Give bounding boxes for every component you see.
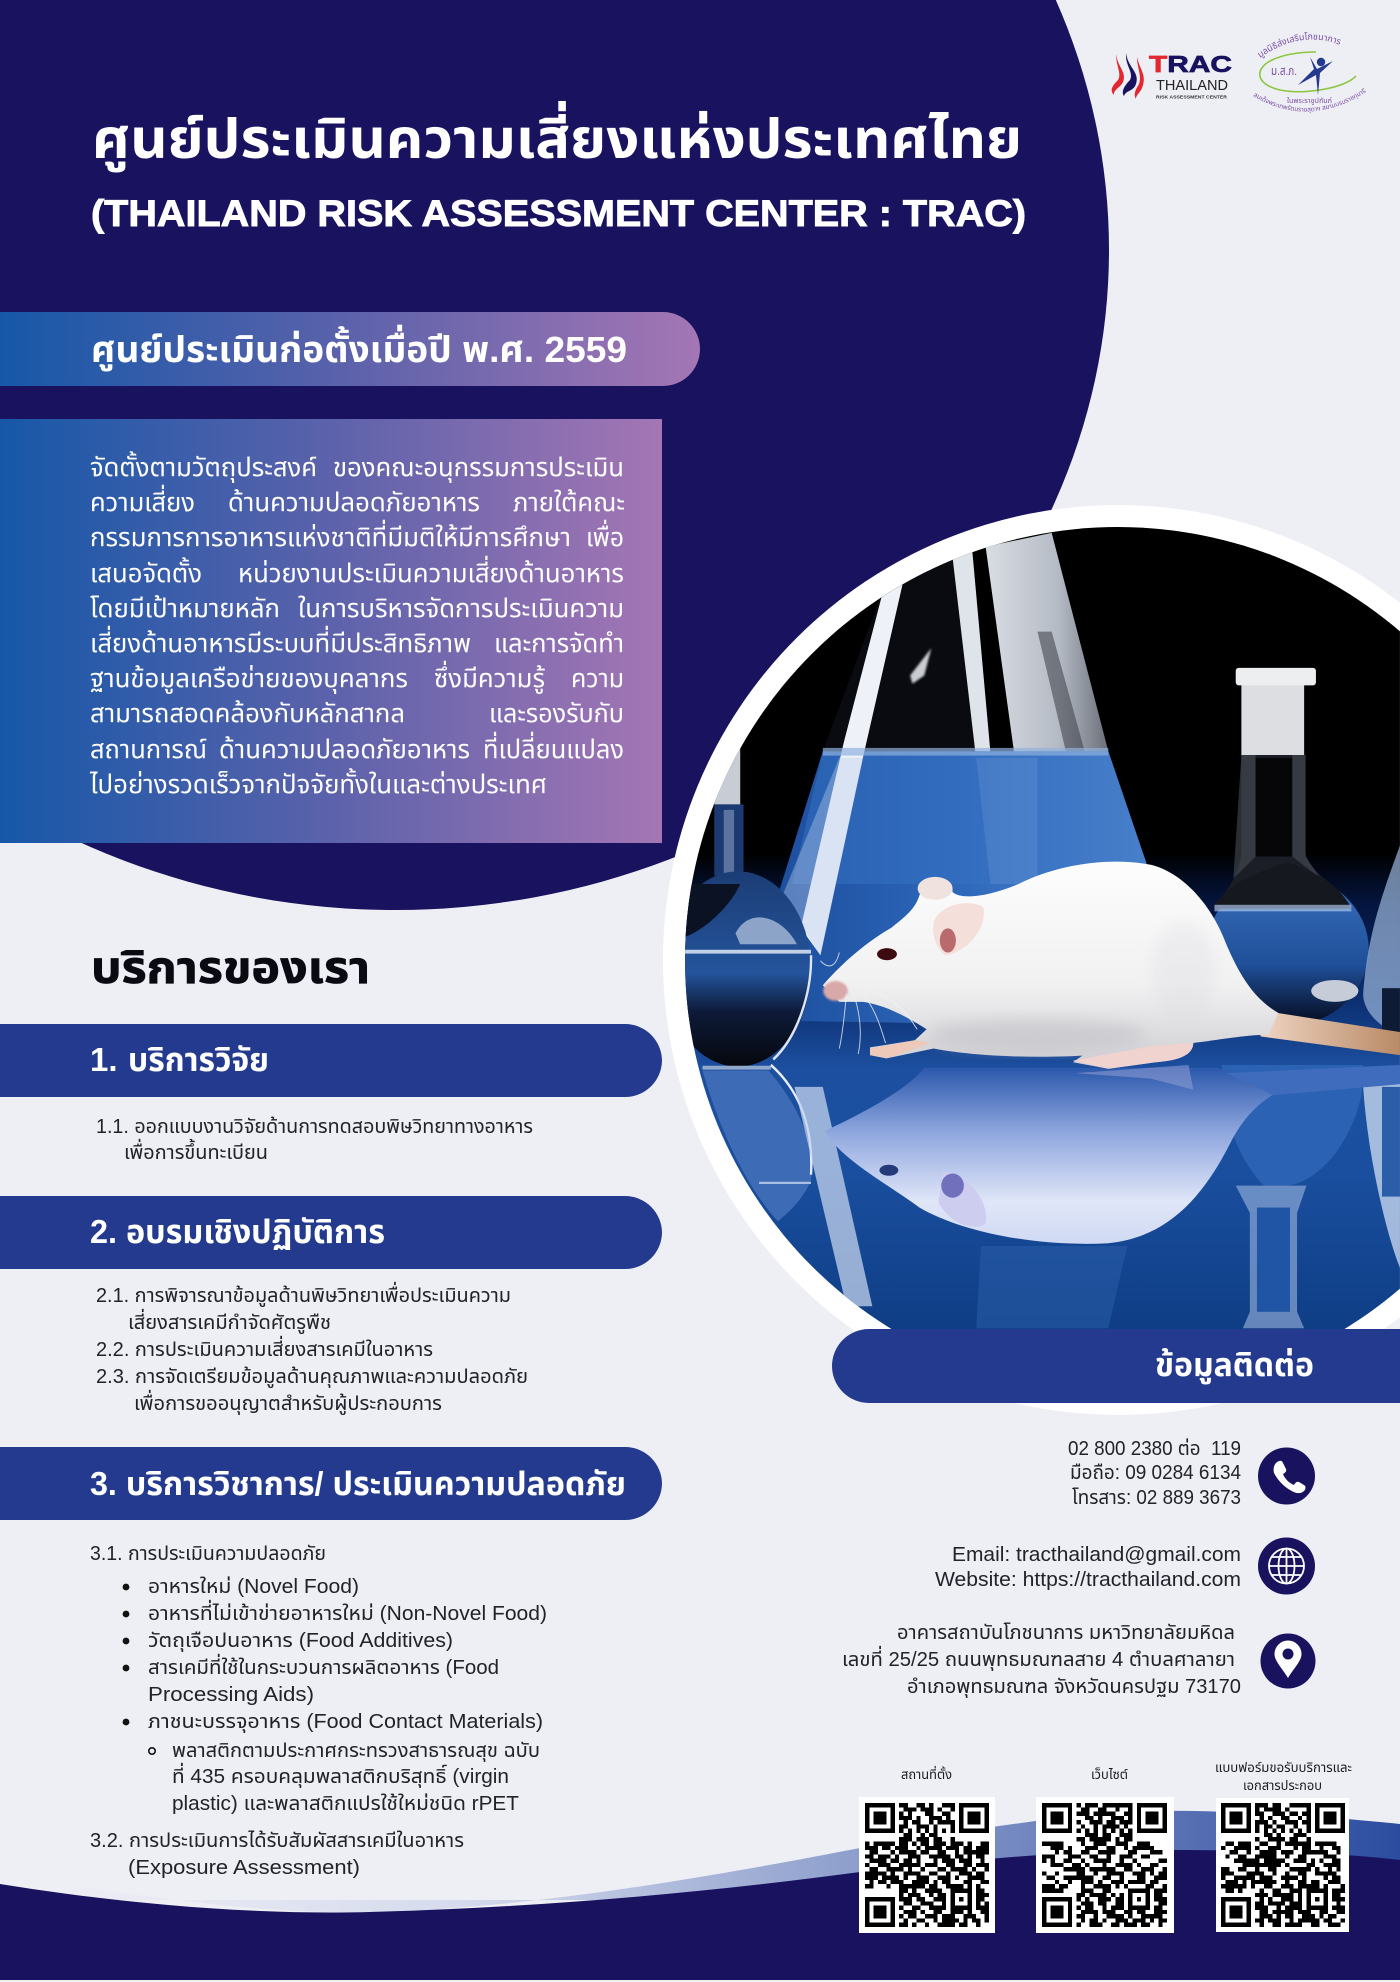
service 3 text: Processing Aids) <box>148 1684 314 1706</box>
contact: phone <box>1068 1437 1315 1509</box>
photo: lab rat and flasks <box>660 500 1400 1415</box>
service 1 banner: 1. <box>90 1041 118 1078</box>
big flask <box>778 533 1160 1027</box>
service 3 text: (Exposure Assessment) <box>128 1857 360 1879</box>
rat reflection <box>825 1065 1400 1244</box>
paragraph text: และการจัดทำ <box>494 628 624 658</box>
contact: web <box>935 1538 1315 1594</box>
contact: address: อาคารสถาบันโภชนาการ มหาวิทยาลัยมหิดล <box>897 1622 1235 1644</box>
paragraph text: สถานการณ์ <box>90 734 207 764</box>
contact: phone: โทรสาร: 02 889 3673 <box>1072 1487 1241 1509</box>
paragraph text: ของคณะอนุกรรมการประเมิน <box>333 452 624 483</box>
paragraph text: เพื่อ <box>586 519 624 552</box>
contact: address: เลขที่ 25/25 ถนนพุทธมณฑลสาย 4 ตำบลศาลายา <box>842 1645 1235 1671</box>
title: Thai: ศูนย์ประเมินความเสี่ยงแห่งประเทศไทย <box>92 100 1022 173</box>
paragraph text: ความ <box>571 663 624 693</box>
logo: foundation: สมเด็จพระเทพรัตนราชสุดาฯ สยามบรมราชกุมารี <box>1254 88 1366 114</box>
QR label: website: เว็บไซต์ <box>1091 1767 1128 1782</box>
service 2 text <box>96 1281 528 1416</box>
QR code: location <box>859 1797 995 1933</box>
service 3 text: พลาสติกตามประกาศกระทรวงสาธารณสุข ฉบับ <box>172 1740 540 1762</box>
paragraph text: โดยมีเป้าหมายหลัก <box>90 593 280 623</box>
contact: phone: มือถือ: 09 0284 6134 <box>1070 1462 1241 1484</box>
bottom wave band <box>0 1811 1400 1980</box>
logo: foundation: ม.ส.ภ. <box>1271 64 1297 78</box>
QR label: form: แบบฟอร์มขอรับบริการและ <box>1215 1760 1352 1775</box>
service 1 banner: บริการวิจัย <box>128 1041 269 1078</box>
service 1 text <box>96 1115 533 1164</box>
QR code: form <box>1216 1798 1349 1932</box>
service 2 text: 2.3. การจัดเตรียมข้อมูลด้านคุณภาพและความปลอดภัย <box>96 1365 528 1389</box>
paragraph text: ฐานข้อมูลเครือข่ายของบุคลากร <box>90 663 408 694</box>
icon: map pin <box>1260 1634 1316 1688</box>
icon: phone <box>1258 1448 1315 1504</box>
paragraph text: สามารถสอดคล้องกับหลักสากล <box>90 698 405 728</box>
QR label: location: สถานที่ตั้ง <box>901 1765 952 1782</box>
logo: TRAC: RISK ASSESSMENT CENTER <box>1156 94 1228 100</box>
service 1 text: เพื่อการขึ้นทะเบียน <box>124 1138 268 1164</box>
floor reflections <box>702 1065 1400 1328</box>
contact: web: Email: tracthailand@gmail.com <box>952 1544 1241 1566</box>
QR label: form <box>1215 1760 1352 1793</box>
service 3 text: สารเคมีที่ใช้ในกระบวนการผลิตอาหาร (Food <box>148 1653 499 1679</box>
service 1 text: 1.1. ออกแบบงานวิจัยด้านการทดสอบพิษวิทยาทางอาหาร <box>96 1115 533 1138</box>
rat feet <box>870 1040 931 1058</box>
paragraph text: ที่เปลี่ยนแปลง <box>483 731 624 764</box>
right-edge flask <box>1363 846 1400 1035</box>
service 3 text: ที่ 435 ครอบคลุมพลาสติกบริสุทธิ์ (virgin <box>172 1762 509 1788</box>
contact: address: อำเภอพุทธมณฑล จังหวัดนครปฐม 73170 <box>907 1676 1241 1698</box>
service 3 text: อาหารที่ไม่เข้าข่ายอาหารใหม่ (Non-Novel Food) <box>148 1599 547 1625</box>
contact banner: ข้อมูลติดต่อ <box>1155 1346 1314 1385</box>
left flask <box>665 747 811 1068</box>
service 3 text: plastic) และพลาสติกแปรใช้ใหม่ชนิด rPET <box>172 1792 519 1815</box>
paragraph text <box>89 450 625 799</box>
logo: foundation: ในพระราชูปถัมภ์ <box>1287 97 1332 105</box>
paragraph text: และรองรับกับ <box>489 698 624 728</box>
paragraph text: ด้านความปลอดภัยอาหาร <box>228 487 480 517</box>
service 3 text: 3.1. การประเมินความปลอดภัย <box>90 1543 326 1565</box>
logo: TRAC <box>1112 51 1232 100</box>
logo: foundation: มูลนิธิส่งเสริมโภชนาการ <box>1258 32 1341 58</box>
service 3 text: อาหารใหม่ (Novel Food) <box>148 1575 359 1598</box>
service 3 banner <box>0 1447 662 1520</box>
service 3 text: วัตถุเจือปนอาหาร (Food Additives) <box>148 1630 453 1652</box>
paragraph text: ในการบริหารจัดการประเมินความ <box>298 593 624 623</box>
paragraph text: เสี่ยงด้านอาหารมีระบบที่มีประสิทธิภาพ <box>90 625 471 658</box>
logo: TRAC: TRAC <box>1149 51 1232 77</box>
QR label: form: เอกสารประกอบ <box>1243 1778 1322 1793</box>
paragraph text: ความเสี่ยง <box>90 484 195 517</box>
service 2 text: เสี่ยงสารเคมีกำจัดศัตรูพืช <box>128 1308 331 1335</box>
service 2 banner: 2. อบรมเชิงปฏิบัติการ <box>90 1213 385 1250</box>
whiskers <box>820 953 917 1054</box>
contact: address <box>842 1622 1316 1698</box>
contact banner <box>832 1329 1400 1403</box>
paragraph text: ไปอย่างรวดเร็วจากปัจจัยทั้งในและต่างประเทศ <box>89 767 547 799</box>
service 3 text: ภาชนะบรรจุอาหาร (Food Contact Materials) <box>148 1711 543 1733</box>
paragraph text: จัดตั้งตามวัตถุประสงค์ <box>90 450 317 483</box>
paragraph text: ด้านความปลอดภัยอาหาร <box>219 734 470 764</box>
QR code: website <box>1036 1797 1174 1933</box>
logos <box>1112 32 1366 114</box>
service 3 text <box>90 1543 547 1879</box>
title: English: (THAILAND RISK ASSESSMENT CENTER : TRAC) <box>91 193 1026 234</box>
rat ears <box>918 877 953 900</box>
navy header ellipse <box>0 0 1109 910</box>
contact: web: Website: https://tracthailand.com <box>935 1569 1241 1591</box>
service 2 text: เพื่อการขออนุญาตสำหรับผู้ประกอบการ <box>134 1389 442 1416</box>
title <box>91 100 1026 234</box>
logo: foundation <box>1254 32 1366 114</box>
rat tail <box>1260 1012 1400 1055</box>
panel: description <box>0 419 662 843</box>
service 3 text: 3.2. การประเมินการได้รับสัมผัสสารเคมีในอาหาร <box>90 1829 464 1852</box>
paragraph text: ซึ่งมีความรู้ <box>434 660 545 694</box>
service 2 text: 2.1. การพิจารณาข้อมูลด้านพิษวิทยาเพื่อประเมินความ <box>96 1281 511 1308</box>
paragraph text: ภายใต้คณะ <box>513 487 625 517</box>
rat eye <box>877 948 897 960</box>
contact: phone: 02 800 2380 ต่อ 119 <box>1068 1437 1241 1460</box>
founded banner <box>0 312 700 386</box>
paragraph text: หน่วยงานประเมินความเสี่ยงด้านอาหาร <box>238 555 624 588</box>
right flask <box>1206 668 1369 1025</box>
paragraph text: เสนอจัดตั้ง <box>90 556 202 588</box>
logo: TRAC: THAILAND <box>1156 78 1228 94</box>
service 1 banner <box>0 1024 662 1097</box>
heading: our services: บริการของเรา <box>91 944 370 993</box>
rat nose <box>823 981 848 1001</box>
service 2 banner <box>0 1196 662 1269</box>
service 3 banner: 3. บริการวิชาการ/ ประเมินความปลอดภัย <box>90 1465 626 1502</box>
paragraph text: กรรมการการอาหารแห่งชาติที่มีมติให้มีการศึกษา <box>90 519 571 552</box>
rat <box>820 862 1400 1090</box>
service 2 text: 2.2. การประเมินความเสี่ยงสารเคมีในอาหาร <box>96 1335 433 1361</box>
founded banner: ศูนย์ประเมินก่อตั้งเมื่อปี พ.ศ. 2559 <box>91 324 627 371</box>
rat body <box>823 862 1278 1069</box>
icon: globe <box>1258 1538 1315 1594</box>
